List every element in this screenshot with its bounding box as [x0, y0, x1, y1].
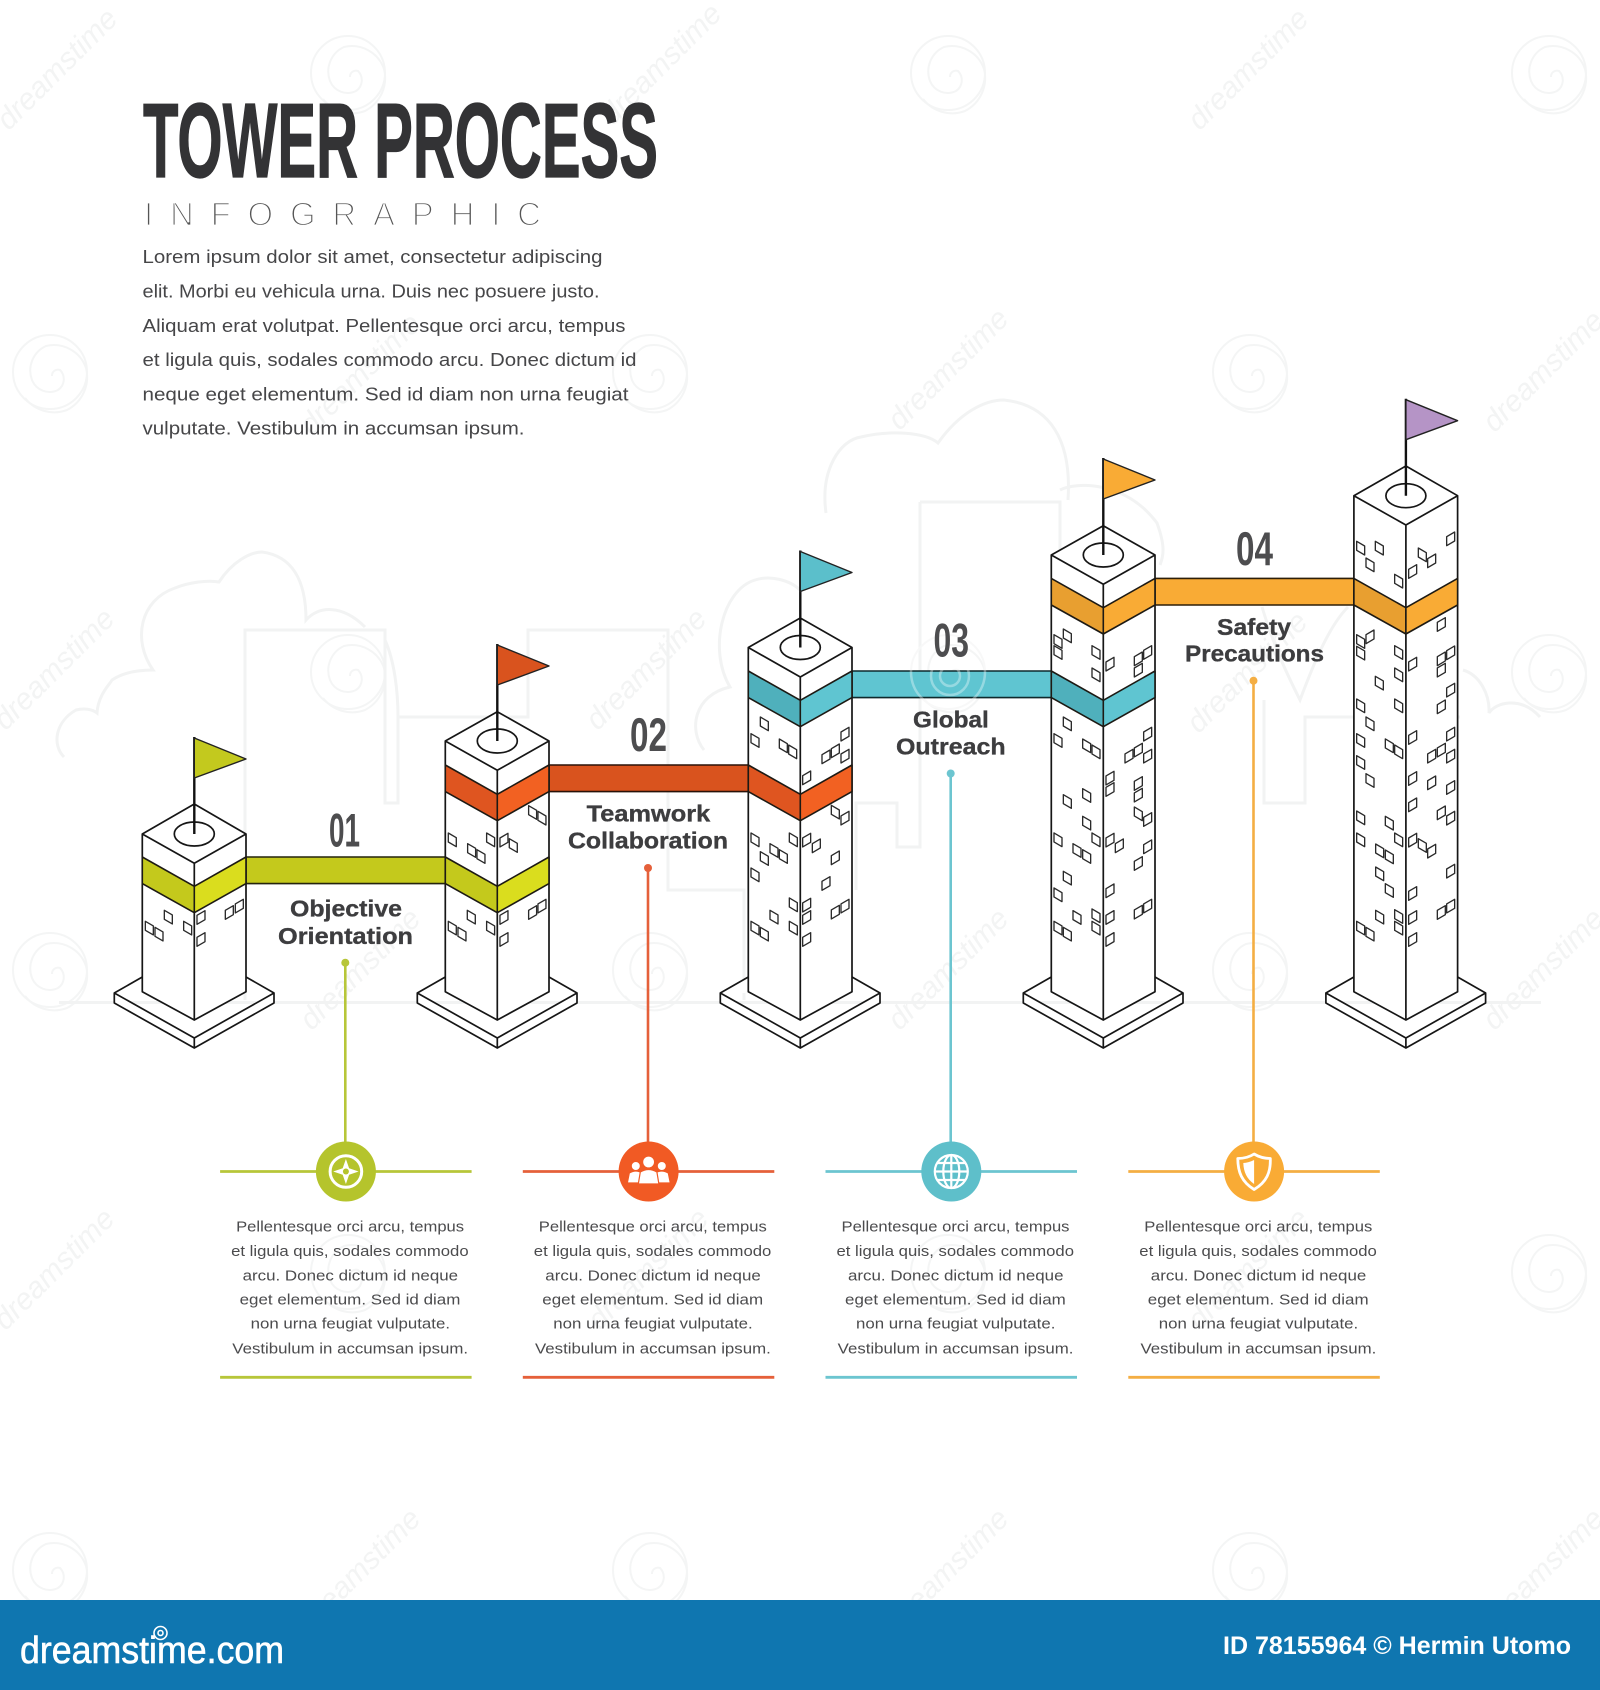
label: Safety Precautions: Safety [1217, 614, 1291, 640]
tower 3 base [720, 977, 880, 1048]
watermark: diagonal text: dreamstime [1180, 605, 1314, 739]
stem and dot 1 [341, 959, 349, 1142]
label: Objective Orientation [278, 896, 413, 949]
watermark: diagonal text: dreamstime [594, 0, 728, 131]
tower 4 windows [1054, 629, 1152, 946]
intro text block: Aliquam erat volutpat. Pellentesque orci arcu, tempus [142, 315, 626, 336]
text 1: arcu. Donec dictum id neque [243, 1267, 458, 1284]
intro text block [142, 246, 636, 438]
text 4: Vestibulum in accumsan ipsum. [1140, 1340, 1376, 1357]
tower 4 flag [1083, 458, 1155, 567]
tower 3 orange band [748, 765, 852, 821]
stem and dot 4 [1250, 677, 1258, 1142]
intro text block: et ligula quis, sodales commodo arcu. Donec dictum id [142, 349, 636, 370]
tower 3 flag [780, 550, 852, 660]
text 2: Pellentesque orci arcu, tempus [539, 1219, 767, 1236]
tower 3 windows [751, 717, 849, 946]
watermark spiral over teal ribbon [911, 635, 985, 709]
watermark: diagonal text: dreamstime [881, 1502, 1015, 1636]
text 3: eget elementum. Sed id diam [845, 1292, 1066, 1309]
watermark: diagonal text: dreamstime [293, 1502, 427, 1636]
text 2: non urna feugiat vulputate. [553, 1316, 753, 1333]
label: Teamwork Collaboration: Teamwork [587, 801, 710, 827]
label: Safety Precautions [1185, 614, 1324, 667]
tower 4 [1023, 458, 1183, 1048]
tower 3 teal band [748, 671, 852, 727]
tower 4 teal band [1051, 671, 1155, 727]
icon: shield [1224, 1142, 1284, 1202]
label: Safety Precautions: Precautions [1185, 641, 1324, 667]
icon: people [619, 1142, 679, 1202]
tower 5 windows upper [1357, 532, 1455, 769]
footer logo: dreamstime.com [20, 1630, 284, 1672]
label: Global Outreach [896, 707, 1006, 759]
watermark: diagonal text: dreamstime [293, 307, 427, 441]
background city skyline [57, 400, 1541, 1002]
tower 2 [417, 644, 577, 1048]
text 3: non urna feugiat vulputate. [856, 1316, 1055, 1333]
label: Objective Orientation: Objective [290, 896, 402, 922]
tower 4 amber band [1051, 578, 1155, 634]
label: Global Outreach: Outreach [896, 733, 1006, 759]
text 1: eget elementum. Sed id diam [240, 1292, 460, 1309]
tower 4 body [1051, 526, 1155, 1020]
stem and dot 2 [644, 864, 652, 1142]
tower 3 [720, 550, 880, 1048]
watermark: diagonal text: dreamstime [581, 1202, 715, 1336]
rules 4 [1128, 1172, 1380, 1377]
column 4 detail [1128, 677, 1380, 1377]
text 4: et ligula quis, sodales commodo [1139, 1243, 1377, 1260]
icon: compass target [316, 1142, 376, 1202]
label: Teamwork Collaboration [568, 801, 728, 853]
column 3 detail [826, 770, 1077, 1377]
watermark: diagonal text: dreamstime [881, 302, 1015, 436]
tower 2 base [417, 977, 577, 1048]
tower 2 flag [477, 644, 549, 753]
tower 2 windows [448, 806, 546, 946]
tower 1 base [114, 977, 274, 1048]
text 4: Pellentesque orci arcu, tempus [1144, 1219, 1372, 1236]
step number 04: 04 [1236, 522, 1273, 575]
text 3: arcu. Donec dictum id neque [848, 1267, 1064, 1284]
watermark: diagonal text: dreamstime [293, 902, 427, 1036]
tower 1 green band [142, 857, 246, 913]
watermark: diagonal text: dreamstime [881, 902, 1015, 1036]
connector ribbon 02 [549, 765, 748, 792]
tower 3 body [748, 618, 852, 1020]
tower 5 body [1354, 466, 1458, 1020]
text 2: Vestibulum in accumsan ipsum. [535, 1340, 771, 1357]
text 1: et ligula quis, sodales commodo [231, 1243, 469, 1260]
tower 1 body [142, 804, 246, 1020]
column 2 detail [523, 864, 774, 1377]
title: TOWER PROCESS [143, 82, 658, 200]
column 1 detail [220, 959, 472, 1377]
icon: globe [921, 1142, 981, 1202]
text 2: eget elementum. Sed id diam [542, 1292, 763, 1309]
intro text block: Lorem ipsum dolor sit amet, consectetur adipiscing [142, 246, 602, 267]
label: Global Outreach: Global [913, 707, 989, 733]
text 2: arcu. Donec dictum id neque [545, 1267, 761, 1284]
subtitle: INFOGRAPHIC [144, 196, 541, 233]
label: Objective Orientation: Orientation [278, 923, 413, 949]
text 4: arcu. Donec dictum id neque [1151, 1267, 1366, 1284]
rules 2 [523, 1172, 774, 1377]
tower 1 [114, 737, 274, 1048]
watermark: diagonal text: dreamstime [1181, 1202, 1315, 1336]
rules 1 [220, 1172, 472, 1377]
tower 5 windows lower [1357, 772, 1455, 946]
tower 1 flag [174, 737, 246, 846]
text 1 [231, 1219, 469, 1357]
footer credit: ID 78155964 © Hermin Utomo [1223, 1632, 1571, 1660]
tower 1 windows [145, 899, 243, 946]
tower 2 body [445, 712, 549, 1020]
connector ribbon 01 [246, 857, 445, 884]
intro text block: vulputate. Vestibulum in accumsan ipsum. [142, 418, 524, 438]
text 3 [836, 1219, 1074, 1357]
text 2 [534, 1219, 771, 1357]
watermark: diagonal text: dreamstime [579, 602, 713, 736]
text 3: Pellentesque orci arcu, tempus [842, 1219, 1070, 1236]
text 1: non urna feugiat vulputate. [251, 1316, 450, 1333]
connector ribbon 03 [852, 671, 1051, 698]
stem and dot 3 [947, 770, 955, 1142]
step number 03: 03 [934, 614, 969, 667]
text 3: et ligula quis, sodales commodo [836, 1243, 1074, 1260]
text 4 [1139, 1219, 1377, 1357]
label: Teamwork Collaboration: Collaboration [568, 827, 728, 853]
tower 5 flag [1386, 399, 1458, 508]
tower 5 [1326, 399, 1486, 1048]
step number 01: 01 [329, 804, 360, 857]
text 4: non urna feugiat vulputate. [1159, 1316, 1358, 1333]
text 1: Pellentesque orci arcu, tempus [236, 1219, 464, 1236]
text 4: eget elementum. Sed id diam [1148, 1292, 1369, 1309]
text 2: et ligula quis, sodales commodo [534, 1243, 771, 1260]
footer logo spiral [154, 1626, 167, 1640]
tower 4 base [1023, 977, 1183, 1048]
text 1: Vestibulum in accumsan ipsum. [232, 1340, 468, 1357]
tower 2 orange band [445, 765, 549, 821]
tower 5 base [1326, 977, 1486, 1048]
intro text block: elit. Morbi eu vehicula urna. Duis nec posuere justo. [142, 280, 600, 302]
tower 2 green band [445, 857, 549, 913]
watermark: diagonal text: dreamstime [1181, 2, 1315, 136]
step number 02: 02 [630, 708, 667, 761]
rules 3 [826, 1172, 1077, 1377]
intro text block: neque eget elementum. Sed id diam non urna feugiat [142, 384, 628, 404]
connector ribbon 04 [1155, 578, 1354, 605]
footer bar [0, 1600, 1600, 1690]
tower 5 amber band [1354, 578, 1458, 634]
text 3: Vestibulum in accumsan ipsum. [838, 1340, 1074, 1357]
